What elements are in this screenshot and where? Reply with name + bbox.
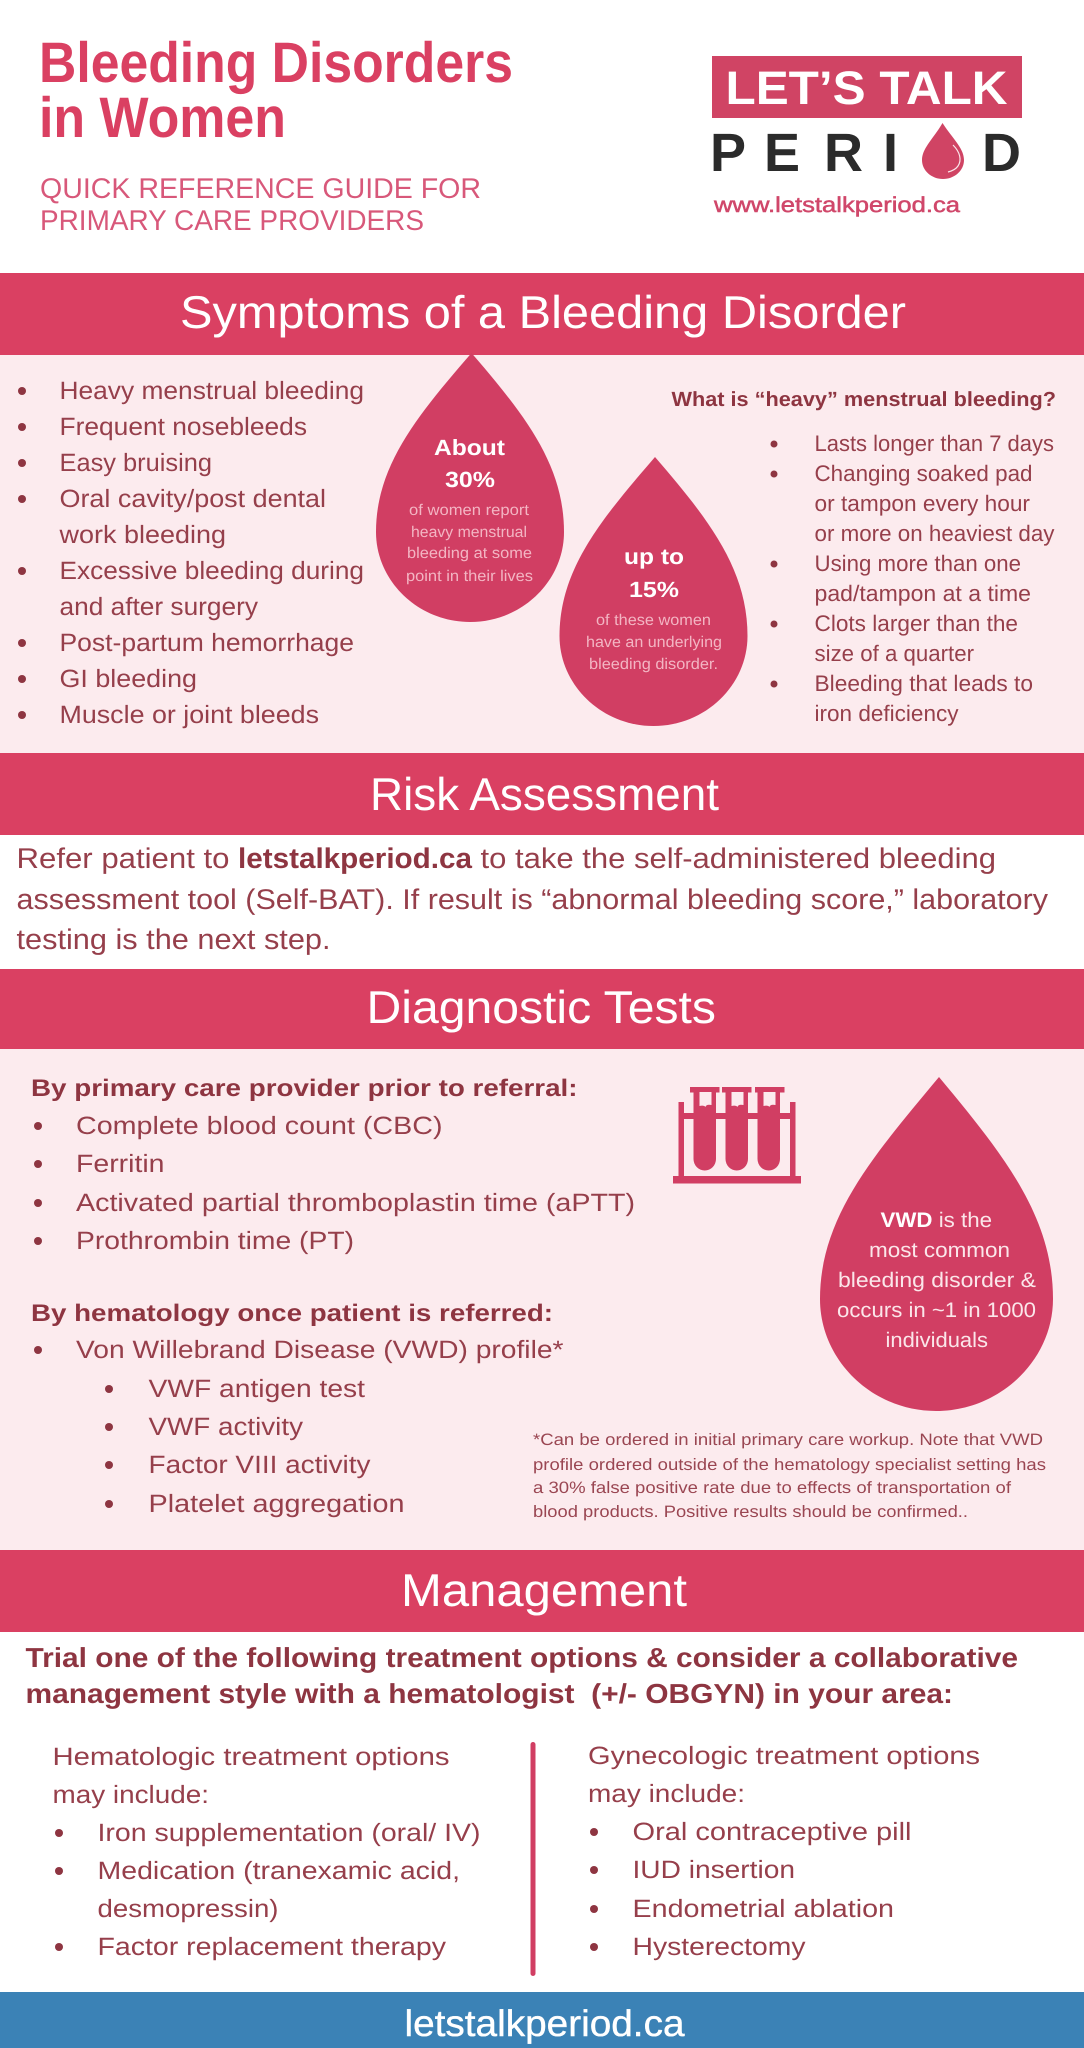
symptoms list: Oral cavity/post dental (60, 485, 326, 513)
hematologic treatment options: Medication (tranexamic acid, (98, 1857, 460, 1885)
hematology tests list: Factor VIII activity (148, 1451, 371, 1479)
drop: about 30%: heavy menstrual (411, 524, 527, 541)
drop: up to 15%: up to (624, 544, 684, 569)
what is heavy menstrual bleeding: Bleeding that leads to (814, 671, 1033, 696)
logo: Let's Talk Period: I (883, 123, 898, 183)
subtitle: PRIMARY CARE PROVIDERS (40, 205, 424, 237)
management intro: Trial one of the following treatment options & consider a collaborative (26, 1642, 1018, 1673)
symptoms list: Easy bruising (60, 449, 212, 477)
footer: letstalkperiod.ca (404, 2003, 685, 2044)
drop: VWD callout: individuals (886, 1329, 988, 1352)
footnote: a 30% false positive rate due to effects of transportation of (533, 1479, 1011, 1497)
header: title block (39, 31, 513, 237)
risk assessment text: Refer patient to (16, 843, 229, 875)
symptoms list: Frequent nosebleeds (60, 413, 307, 441)
heading: management band (0, 1550, 1084, 1632)
footer (0, 1992, 1084, 2048)
heading: symptoms band: Symptoms of a Bleeding Disorder (180, 286, 906, 338)
what is heavy menstrual bleeding: Lasts longer than 7 days (814, 431, 1054, 456)
drop: up to 15%: have an underlying (586, 634, 722, 651)
heading: management band: Management (401, 1564, 687, 1616)
drop: VWD callout (820, 1077, 1053, 1411)
drop: up to 15%: 15% (629, 577, 679, 602)
risk assessment text: to take the self-administered bleeding (480, 843, 996, 875)
risk assessment text: letstalkperiod.ca (238, 843, 473, 875)
gynecologic treatment options: IUD insertion (632, 1856, 795, 1884)
heading: symptoms band (0, 273, 1084, 355)
drop: up to 15%: of these women (596, 612, 711, 629)
hematologic treatment options: Hematologic treatment options (52, 1743, 450, 1771)
footnote (533, 1431, 1046, 1521)
logo: Let's Talk Period: www.letstalkperiod.ca (713, 193, 960, 217)
heading: diagnostic tests band: Diagnostic Tests (366, 981, 716, 1033)
title: Bleeding Disorders (39, 31, 513, 95)
symptoms list: Muscle or joint bleeds (60, 701, 319, 729)
logo: Let's Talk Period: R (824, 123, 863, 183)
heading: risk assessment band: Risk Assessment (370, 768, 719, 820)
drop: VWD callout: occurs in ~1 in 1000 (837, 1299, 1036, 1322)
primary care tests list: Ferritin (76, 1150, 164, 1178)
drop: about 30%: About (434, 435, 506, 460)
drop: about 30%: of women report (409, 502, 530, 519)
hematology tests list (31, 1300, 564, 1518)
gynecologic treatment options (588, 1742, 980, 1961)
what is heavy menstrual bleeding: Clots larger than the (814, 611, 1018, 636)
heading: risk assessment band (0, 753, 1084, 835)
gynecologic treatment options: may include: (588, 1780, 745, 1808)
what is heavy menstrual bleeding: iron deficiency (814, 701, 959, 726)
title (39, 31, 513, 150)
symptoms list: Excessive bleeding during (60, 557, 364, 585)
drop: up to 15%: bleeding disorder. (589, 656, 718, 673)
panel: diagnostic tests (0, 969, 1084, 1550)
drop: about 30%: 30% (445, 467, 495, 492)
gynecologic treatment options: Hysterectomy (632, 1933, 806, 1961)
drop: about 30% (376, 353, 564, 622)
subtitle: QUICK REFERENCE GUIDE FOR (40, 173, 481, 205)
footnote: *Can be ordered in initial primary care workup. Note that VWD (533, 1431, 1043, 1449)
logo: Let's Talk Period: P (710, 123, 746, 183)
what is heavy menstrual bleeding: size of a quarter (814, 641, 974, 666)
footnote: blood products. Positive results should be confirmed.. (533, 1503, 968, 1521)
hematology tests list: Platelet aggregation (148, 1490, 404, 1518)
title: in Women (39, 86, 286, 150)
hematology tests list: VWF antigen test (148, 1375, 365, 1403)
drop: about 30%: bleeding at some (407, 545, 532, 562)
subtitle (40, 173, 481, 237)
hematologic treatment options: Factor replacement therapy (98, 1933, 447, 1961)
panel: symptoms (0, 273, 1084, 753)
symptoms list: and after surgery (60, 593, 259, 621)
symptoms list: work bleeding (58, 521, 226, 549)
risk assessment text (16, 843, 1049, 956)
what is heavy menstrual bleeding: Using more than one (814, 551, 1021, 576)
management intro (26, 1642, 1018, 1709)
hematologic treatment options: Iron supplementation (oral/ IV) (98, 1819, 480, 1847)
risk assessment text: testing is the next step. (16, 924, 330, 956)
panel: management (0, 1550, 1084, 1976)
footnote: profile ordered outside of the hematology specialist setting has (533, 1456, 1046, 1474)
symptoms list: Heavy menstrual bleeding (60, 377, 364, 405)
what is heavy menstrual bleeding: pad/tampon at a time (814, 581, 1031, 606)
panel: risk assessment (0, 753, 1084, 956)
hematologic treatment options: may include: (52, 1781, 209, 1809)
what is heavy menstrual bleeding (672, 388, 1056, 726)
what is heavy menstrual bleeding: or tampon every hour (814, 491, 1030, 516)
what is heavy menstrual bleeding: What is “heavy” menstrual bleeding? (672, 388, 1056, 411)
primary care tests list (31, 1075, 635, 1255)
symptoms list: GI bleeding (60, 665, 197, 693)
logo: Let's Talk Period (710, 56, 1022, 217)
primary care tests list: By primary care provider prior to referral: (31, 1075, 578, 1102)
drop: VWD callout: bleeding disorder & (838, 1269, 1036, 1292)
icon: test tubes (673, 1087, 801, 1184)
what is heavy menstrual bleeding: or more on heaviest day (814, 521, 1055, 546)
drop: VWD callout: most common (869, 1239, 1010, 1262)
heading: diagnostic tests band (0, 969, 1084, 1049)
logo: Let's Talk Period: D (982, 123, 1021, 183)
primary care tests list: Activated partial thromboplastin time (aPTT) (76, 1189, 635, 1217)
hematology tests list: VWF activity (148, 1413, 304, 1441)
risk assessment text: assessment tool (Self-BAT). If result is “abnormal bleeding score,” laboratory (16, 884, 1049, 916)
drop: up to 15% (560, 457, 748, 726)
gynecologic treatment options: Endometrial ablation (632, 1895, 894, 1923)
logo: Let's Talk Period: LET’S TALK (726, 61, 1008, 114)
drop: about 30%: point in their lives (406, 568, 533, 585)
symptoms list (18, 377, 364, 729)
management intro: management style with a hematologist (+/- OBGYN) in your area: (26, 1678, 953, 1709)
primary care tests list: Complete blood count (CBC) (76, 1112, 442, 1140)
drop: VWD callout: VWD is the (880, 1209, 992, 1232)
what is heavy menstrual bleeding: Changing soaked pad (814, 461, 1032, 486)
hematologic treatment options: desmopressin) (98, 1895, 278, 1923)
gynecologic treatment options: Oral contraceptive pill (632, 1818, 912, 1846)
logo: Let's Talk Period: E (764, 123, 800, 183)
symptoms list: Post-partum hemorrhage (60, 629, 354, 657)
hematology tests list: Von Willebrand Disease (VWD) profile* (76, 1336, 564, 1364)
primary care tests list: Prothrombin time (PT) (76, 1227, 354, 1255)
hematology tests list: By hematology once patient is referred: (31, 1300, 553, 1327)
hematologic treatment options (52, 1743, 480, 1961)
gynecologic treatment options: Gynecologic treatment options (588, 1742, 980, 1770)
